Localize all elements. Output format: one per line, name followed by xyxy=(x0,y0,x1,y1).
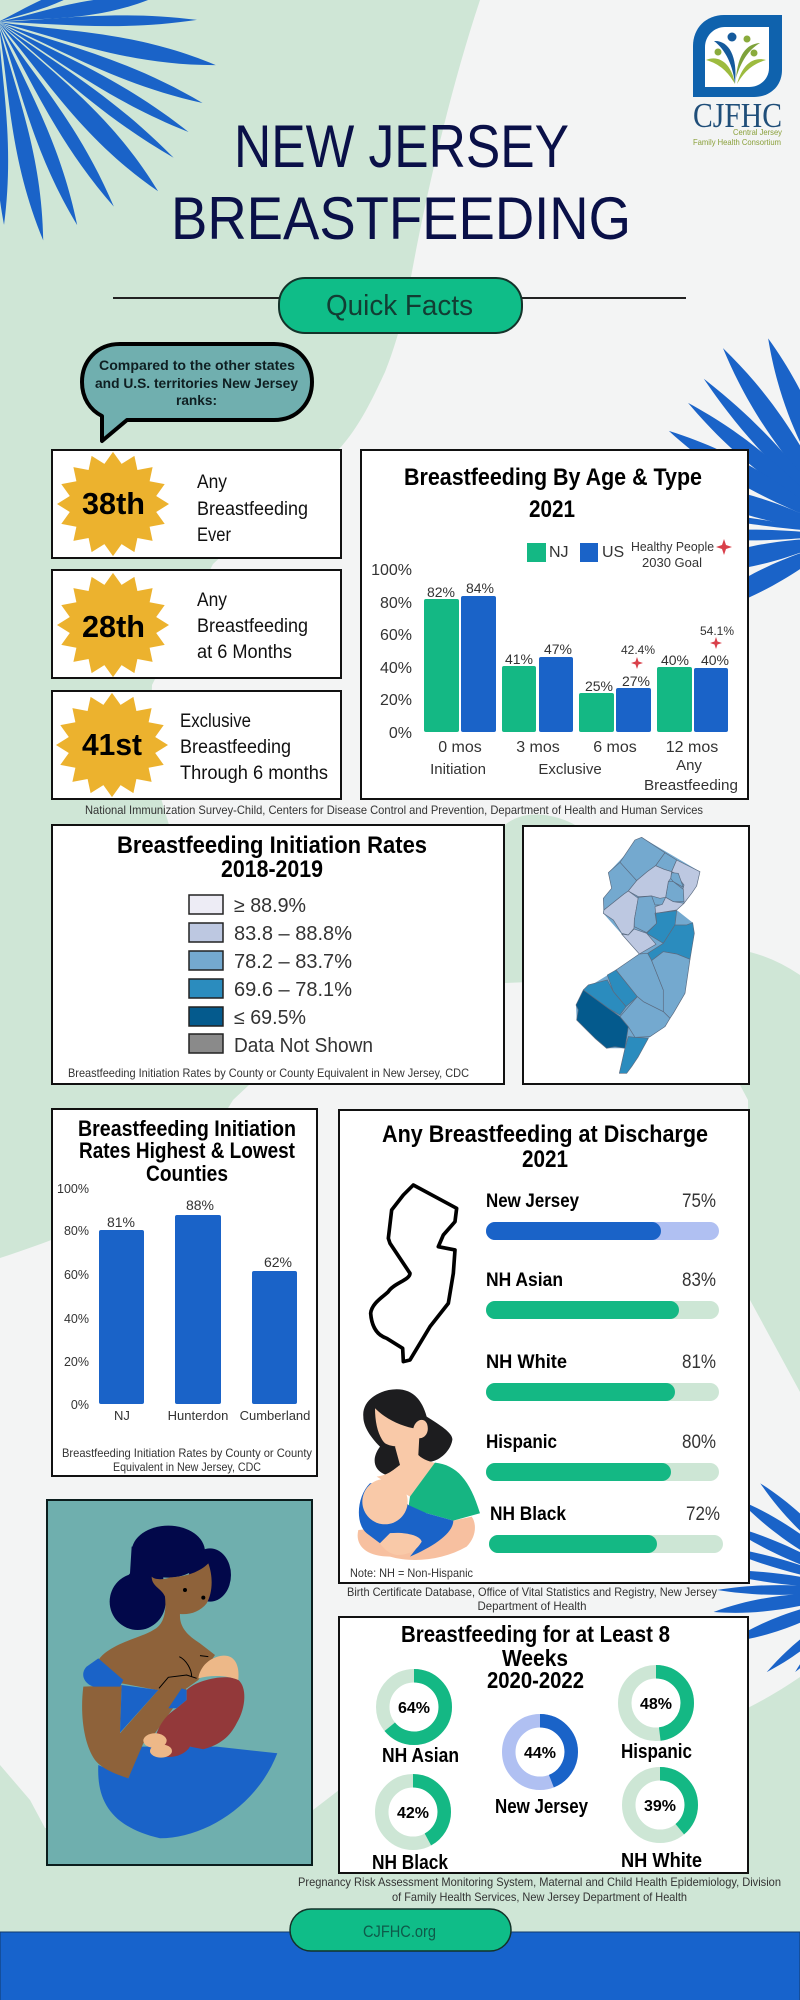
panel: rank 41st: Exclusive xyxy=(180,711,251,732)
progress bar: Hispanic xyxy=(486,1432,719,1481)
x axis labels: Exclusive xyxy=(538,761,602,778)
county chart y axis: 0% xyxy=(71,1398,89,1412)
weeks title xyxy=(401,1621,670,1693)
weeks title: 2020-2022 xyxy=(487,1667,584,1693)
logo: CJFHC: Central Jersey xyxy=(733,127,783,137)
y axis labels: 40% xyxy=(380,660,412,677)
icon: mother nursing baby xyxy=(358,1389,480,1560)
source: pregnancy risk assessment: of Family Health Services, New Jersey Department of Health xyxy=(392,1890,687,1904)
chart legend: US xyxy=(602,544,624,561)
panel: rank 28th xyxy=(52,570,341,678)
discharge title: Any Breastfeeding at Discharge xyxy=(382,1121,708,1148)
weeks title: Breastfeeding for at Least 8 xyxy=(401,1621,670,1647)
y axis labels: 0% xyxy=(389,725,412,742)
panel: any breastfeeding at discharge xyxy=(339,1110,749,1583)
panel: rank 38th: Any xyxy=(197,472,227,493)
speech bubble: and U.S. territories New Jersey xyxy=(95,375,298,391)
x axis labels: Any xyxy=(676,757,702,774)
donut: NH Asian 64% xyxy=(382,1676,459,1767)
logo: CJFHC xyxy=(693,15,783,147)
discharge title: 2021 xyxy=(522,1146,568,1173)
x axis labels: Initiation xyxy=(430,761,486,778)
county chart y axis xyxy=(57,1182,89,1412)
donut: New Jersey 44%: New Jersey xyxy=(495,1796,589,1818)
speech bubble xyxy=(82,344,312,441)
county chart y axis: 60% xyxy=(64,1268,89,1282)
legend labels xyxy=(234,895,373,1057)
panel: breastfeeding initiation rates legend xyxy=(52,825,504,1084)
speech bubble: Compared to the other states xyxy=(99,357,295,373)
bar value labels: 25% xyxy=(585,678,613,694)
progress bar: NH Asian: NH Asian xyxy=(486,1270,563,1291)
discharge title xyxy=(382,1121,708,1173)
donut: New Jersey 44%: 44% xyxy=(524,1745,556,1762)
donut: NH White 39% xyxy=(621,1774,702,1872)
chart title xyxy=(404,464,702,523)
progress bar: Hispanic: 80% xyxy=(682,1432,716,1453)
donut: NH Asian 64%: 64% xyxy=(398,1700,430,1717)
quick facts pill with rule xyxy=(113,278,686,333)
progress bar: NH White: NH White xyxy=(486,1352,567,1373)
county bar values and names xyxy=(107,1197,310,1423)
chart legend: Healthy People xyxy=(631,539,714,554)
speech bubble: ranks: xyxy=(176,392,217,408)
footer pill: CJFHC.org: CJFHC.org xyxy=(363,1922,436,1941)
x axis labels xyxy=(430,739,738,794)
county chart y axis: 80% xyxy=(64,1224,89,1238)
chart legend xyxy=(527,539,732,570)
progress bar: NH Asian xyxy=(486,1270,719,1319)
x axis labels: 0 mos xyxy=(438,739,482,756)
county bar chart xyxy=(99,1215,297,1404)
panel: highest and lowest counties: Equivalent in New Jersey, CDC xyxy=(113,1460,261,1474)
legend labels: 78.2 – 83.7% xyxy=(234,951,352,973)
footer pill: CJFHC.org xyxy=(290,1909,511,1951)
chart title: Breastfeeding By Age & Type xyxy=(404,464,702,491)
donut: Hispanic 48% xyxy=(621,1672,692,1763)
panel: illustration of mother nursing xyxy=(47,1500,312,1865)
title xyxy=(171,113,631,252)
legend labels: ≤ 69.5% xyxy=(234,1007,306,1029)
legend labels: 69.6 – 78.1% xyxy=(234,979,352,1001)
progress bar: NH Black: 72% xyxy=(686,1504,720,1525)
bar value labels: 47% xyxy=(544,641,572,657)
panel: new jersey county map xyxy=(523,826,749,1084)
county chart y axis: 40% xyxy=(64,1312,89,1326)
county bar values and names: 88% xyxy=(186,1197,214,1213)
healthy people goal markers xyxy=(621,624,734,669)
healthy people goal markers: 42.4% xyxy=(621,643,655,657)
panel: rank 41st: Through 6 months xyxy=(180,763,328,784)
source: pregnancy risk assessment xyxy=(298,1875,781,1904)
y axis labels: 20% xyxy=(380,692,412,709)
panel: breastfeeding for at least 8 weeks xyxy=(339,1617,748,1874)
choropleth map xyxy=(576,837,700,1073)
x axis labels: Breastfeeding xyxy=(644,777,738,794)
donut: NH Asian 64%: NH Asian xyxy=(382,1745,459,1767)
x axis labels: 3 mos xyxy=(516,739,560,756)
county bar values and names: 62% xyxy=(264,1254,292,1270)
y axis labels: 80% xyxy=(380,595,412,612)
source: birth certificate database: Birth Certificate Database, Office of Vital Statistics and Registry, New Jersey xyxy=(347,1585,717,1599)
y axis labels xyxy=(371,562,412,742)
bar value labels: 82% xyxy=(427,584,455,600)
chart legend: NJ xyxy=(549,544,569,561)
county chart y axis: 20% xyxy=(64,1355,89,1369)
panel: rank 28th: 28th xyxy=(82,609,145,644)
panel: breastfeeding initiation rates legend: Breastfeeding Initiation Rates xyxy=(117,832,427,859)
progress bar: NH Asian: 83% xyxy=(682,1270,716,1291)
bar value labels: 84% xyxy=(466,580,494,596)
logo: CJFHC: CJFHC xyxy=(693,96,782,135)
progress bar: New Jersey: New Jersey xyxy=(486,1191,579,1212)
panel: rank 41st: Breastfeeding xyxy=(180,737,291,758)
progress bar: Hispanic: Hispanic xyxy=(486,1432,557,1453)
source: birth certificate database: Department of Health xyxy=(478,1599,586,1613)
bar value labels xyxy=(427,580,729,694)
county bar values and names: Cumberland xyxy=(240,1408,310,1423)
county bar values and names: NJ xyxy=(114,1408,130,1423)
donut: NH White 39%: NH White xyxy=(621,1850,702,1872)
progress bar: NH Black xyxy=(489,1504,723,1553)
progress bar: NH Black: NH Black xyxy=(490,1504,566,1525)
x axis labels: 12 mos xyxy=(666,739,718,756)
panel: rank 38th: Breastfeeding xyxy=(197,499,308,520)
county bar values and names: Hunterdon xyxy=(168,1408,228,1423)
panel: breastfeeding initiation rates legend: 2018-2019 xyxy=(221,856,323,883)
county chart title: Counties xyxy=(146,1161,228,1186)
palm leaf: bottom right xyxy=(711,1479,800,1676)
title: NEW JERSEY xyxy=(234,113,569,180)
source: national immunization survey: National Immunization Survey-Child, Centers for Disease Control and Prevention, Department of Health and Human Services xyxy=(85,803,703,817)
progress bar: NH White xyxy=(486,1352,719,1401)
panel: rank 38th xyxy=(52,450,341,558)
panel: breastfeeding initiation rates legend: Breastfeeding Initiation Rates by County or County Equivalent in New Jersey, CDC xyxy=(68,1066,469,1080)
donut: New Jersey 44% xyxy=(495,1721,589,1818)
panel: breastfeeding by age and type xyxy=(361,450,748,799)
panel: rank 28th: Any xyxy=(197,590,227,611)
donut: NH Black 42% xyxy=(372,1781,449,1874)
donut: Hispanic 48%: 48% xyxy=(640,1696,672,1713)
logo: CJFHC: Family Health Consortium xyxy=(693,137,781,147)
chart legend: 2030 Goal xyxy=(642,555,702,570)
x axis labels: 6 mos xyxy=(593,739,637,756)
county bar values and names: 81% xyxy=(107,1214,135,1230)
chart title: 2021 xyxy=(529,496,575,523)
panel: rank 41st: 41st xyxy=(82,727,142,762)
y axis labels: 100% xyxy=(371,562,412,579)
panel: rank 38th: 38th xyxy=(82,486,145,521)
panel: rank 38th: Ever xyxy=(197,525,232,546)
bar value labels: 40% xyxy=(661,652,689,668)
icon: new jersey outline xyxy=(371,1185,457,1362)
panel: rank 28th: Breastfeeding xyxy=(197,616,308,637)
panel: highest and lowest counties xyxy=(52,1109,317,1476)
legend labels: 83.8 – 88.8% xyxy=(234,923,352,945)
donut: NH Black 42%: 42% xyxy=(397,1805,429,1822)
healthy people goal markers: 54.1% xyxy=(700,624,734,638)
panel: rank 28th: at 6 Months xyxy=(197,642,292,663)
map legend xyxy=(189,895,223,1053)
quick facts pill with rule: Quick Facts xyxy=(326,290,473,322)
title: BREASTFEEDING xyxy=(171,185,631,252)
legend labels: ≥ 88.9% xyxy=(234,895,306,917)
legend labels: Data Not Shown xyxy=(234,1035,373,1057)
y axis labels: 60% xyxy=(380,627,412,644)
county chart title: Rates Highest & Lowest xyxy=(79,1138,296,1163)
county chart title: Breastfeeding Initiation xyxy=(78,1116,296,1141)
icon: mother and baby xyxy=(82,1526,277,1838)
progress bar: New Jersey xyxy=(486,1191,719,1240)
county chart y axis: 100% xyxy=(57,1182,89,1196)
bar chart xyxy=(424,596,728,732)
progress bar: New Jersey: 75% xyxy=(682,1191,716,1212)
donut: Hispanic 48%: Hispanic xyxy=(621,1741,692,1763)
panel: rank 41st xyxy=(52,691,341,799)
palm leaf: top left xyxy=(0,0,217,242)
panel: any breastfeeding at discharge: Note: NH = Non-Hispanic xyxy=(350,1566,473,1580)
palm leaf: right middle xyxy=(660,334,800,631)
bar value labels: 40% xyxy=(701,652,729,668)
bar value labels: 27% xyxy=(622,673,650,689)
donut: NH Black 42%: NH Black xyxy=(372,1852,449,1874)
footer band xyxy=(0,1932,800,2000)
progress bar: NH White: 81% xyxy=(682,1352,716,1373)
county chart title xyxy=(78,1116,296,1186)
donut: NH White 39%: 39% xyxy=(644,1798,676,1815)
panel: highest and lowest counties: Breastfeeding Initiation Rates by County or County xyxy=(62,1446,312,1460)
bar value labels: 41% xyxy=(505,651,533,667)
source: birth certificate database xyxy=(347,1585,717,1613)
weeks title: Weeks xyxy=(502,1645,568,1671)
